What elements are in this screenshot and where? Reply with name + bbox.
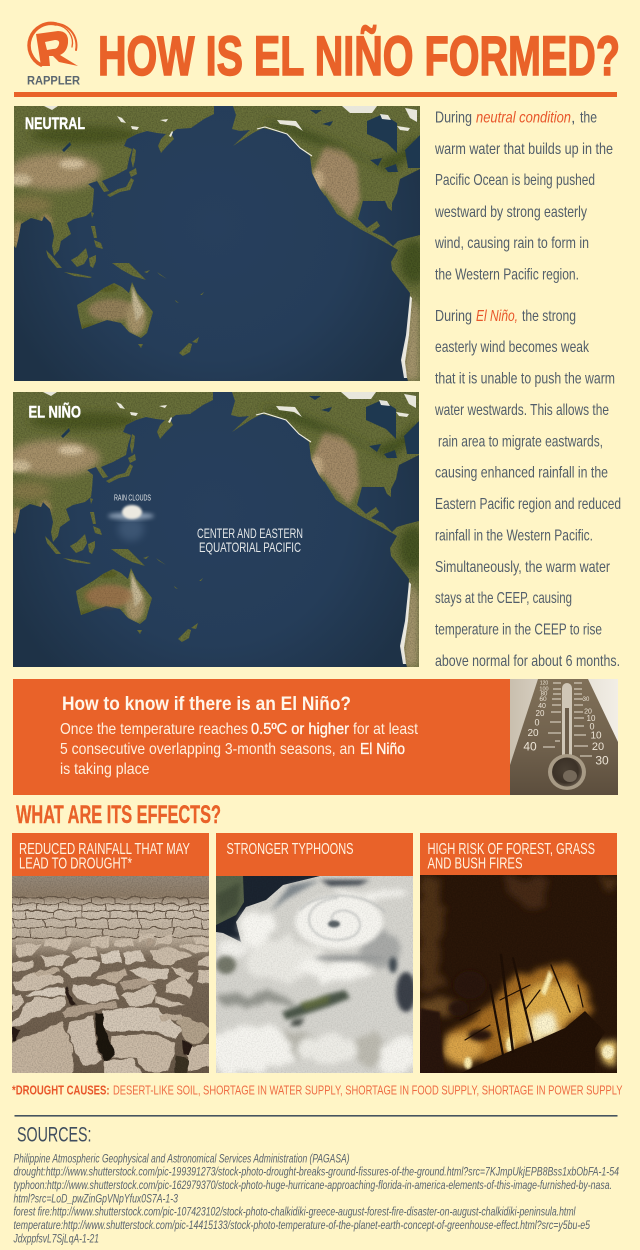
text block: El Niño condition: El Niño,: [476, 308, 518, 325]
callout body: for at least: [353, 721, 418, 738]
icon: thermometer photo: 120: [540, 680, 548, 686]
logo: Rappler: [27, 23, 81, 88]
callout body: [60, 721, 418, 778]
text block: neutral condition: westward by strong easterly: [434, 204, 587, 221]
panel heading: STRONGER TYPHOONS: [226, 841, 354, 858]
reddish Australia tint: [84, 585, 132, 607]
icon: thermometer photo: 10: [587, 714, 596, 723]
source list: Philippine Atmospheric Geophysical and Astronomical Services Administration (PAGASA): [14, 1151, 350, 1165]
icon: thermometer photo: 0: [589, 722, 595, 732]
drought causes note: *DROUGHT CAUSES:: [12, 1082, 110, 1098]
region label: CENTER AND EASTERN: [197, 525, 303, 541]
text block: neutral condition: the: [580, 110, 597, 126]
icon: thermometer photo: 10: [590, 730, 602, 742]
map: neutral: [8, 106, 428, 381]
panel header: [420, 833, 617, 875]
icon: thermometer photo: 0: [534, 718, 540, 728]
icon: thermometer photo: [510, 679, 618, 795]
text block: neutral condition: [434, 110, 613, 284]
title rule: [14, 92, 617, 97]
callout body: 0.5ºC or higher: [251, 721, 350, 738]
text block: neutral condition: ,: [571, 110, 575, 126]
source list: [13, 1151, 619, 1245]
photo: typhoon from space: [206, 876, 416, 1074]
icon: thermometer photo: 20: [536, 709, 545, 718]
icon: thermometer photo: 30: [595, 754, 609, 768]
region label: [197, 525, 303, 555]
text block: neutral condition: wind, causing rain to form in: [434, 235, 589, 252]
callout body: is taking place: [60, 761, 150, 778]
callout body: Once the temperature reaches: [60, 721, 248, 738]
region label: EQUATORIAL PACIFIC: [199, 539, 301, 555]
photo: forest fire: [420, 875, 617, 1073]
panel heading: LEAD TO DROUGHT*: [19, 856, 132, 872]
callout body: El Niño: [360, 741, 405, 758]
map label: El Niño: EL NIÑO: [28, 402, 81, 422]
icon: thermometer photo: 60: [539, 696, 547, 703]
callout: how to know: [13, 679, 510, 795]
panel heading: [19, 841, 190, 872]
icon: thermometer photo: 20: [527, 728, 539, 739]
icon: thermometer photo: 40: [538, 703, 546, 710]
icon: thermometer photo: 20: [584, 708, 592, 716]
panel header: [216, 833, 413, 876]
heading: effects: WHAT ARE ITS EFFECTS?: [16, 801, 221, 829]
heading: sources: SOURCES:: [17, 1124, 92, 1146]
rain clouds label: RAIN CLOUDS: [114, 494, 151, 502]
panel: typhoons: [206, 833, 416, 1074]
icon: thermometer photo: 30: [583, 697, 590, 703]
map: El Niño: [7, 392, 427, 667]
map label: neutral: NEUTRAL: [25, 114, 85, 133]
panel heading: REDUCED RAINFALL THAT MAY: [19, 841, 190, 858]
panel: drought: [8, 833, 216, 1075]
icon: thermometer photo: 40: [523, 740, 537, 754]
panel header: [12, 833, 209, 876]
panel: fires: AND BUSH FIRES: [428, 856, 522, 872]
sources rule: [14, 1115, 618, 1117]
text block: El Niño condition: easterly wind becomes weak: [435, 339, 590, 356]
source list: html?src=LoD_pwZinGpVNpYfux0S7A-1-3: [14, 1191, 178, 1205]
source list: JdxppfsvL7SjLqA-1-21: [13, 1231, 99, 1245]
icon: thermometer photo: 80: [541, 692, 548, 698]
text block: El Niño condition: rainfall in the Western Pacific.: [435, 528, 593, 544]
text block: El Niño condition: stays at the CEEP, causing: [435, 590, 572, 607]
text block: neutral condition: neutral condition: [476, 110, 571, 126]
text block: neutral condition: During: [435, 110, 472, 126]
text block: El Niño condition: the strong: [522, 308, 576, 325]
logo wordmark: RAPPLER: [27, 76, 81, 88]
text block: El Niño condition: During: [435, 308, 472, 325]
panel: fires: [420, 833, 617, 1073]
callout heading: How to know if there is an El Niño?: [62, 694, 351, 715]
photo: cracked earth: [8, 876, 216, 1075]
callout body: 5 consecutive overlapping 3-month seasons, an: [60, 741, 355, 758]
rain clouds icon: [108, 505, 154, 541]
text block: neutral condition: the Western Pacific region.: [435, 266, 579, 284]
icon: thermometer photo: 100: [539, 686, 549, 692]
icon: thermometer photo: 20: [592, 741, 604, 753]
text block: El Niño condition: [434, 308, 621, 670]
